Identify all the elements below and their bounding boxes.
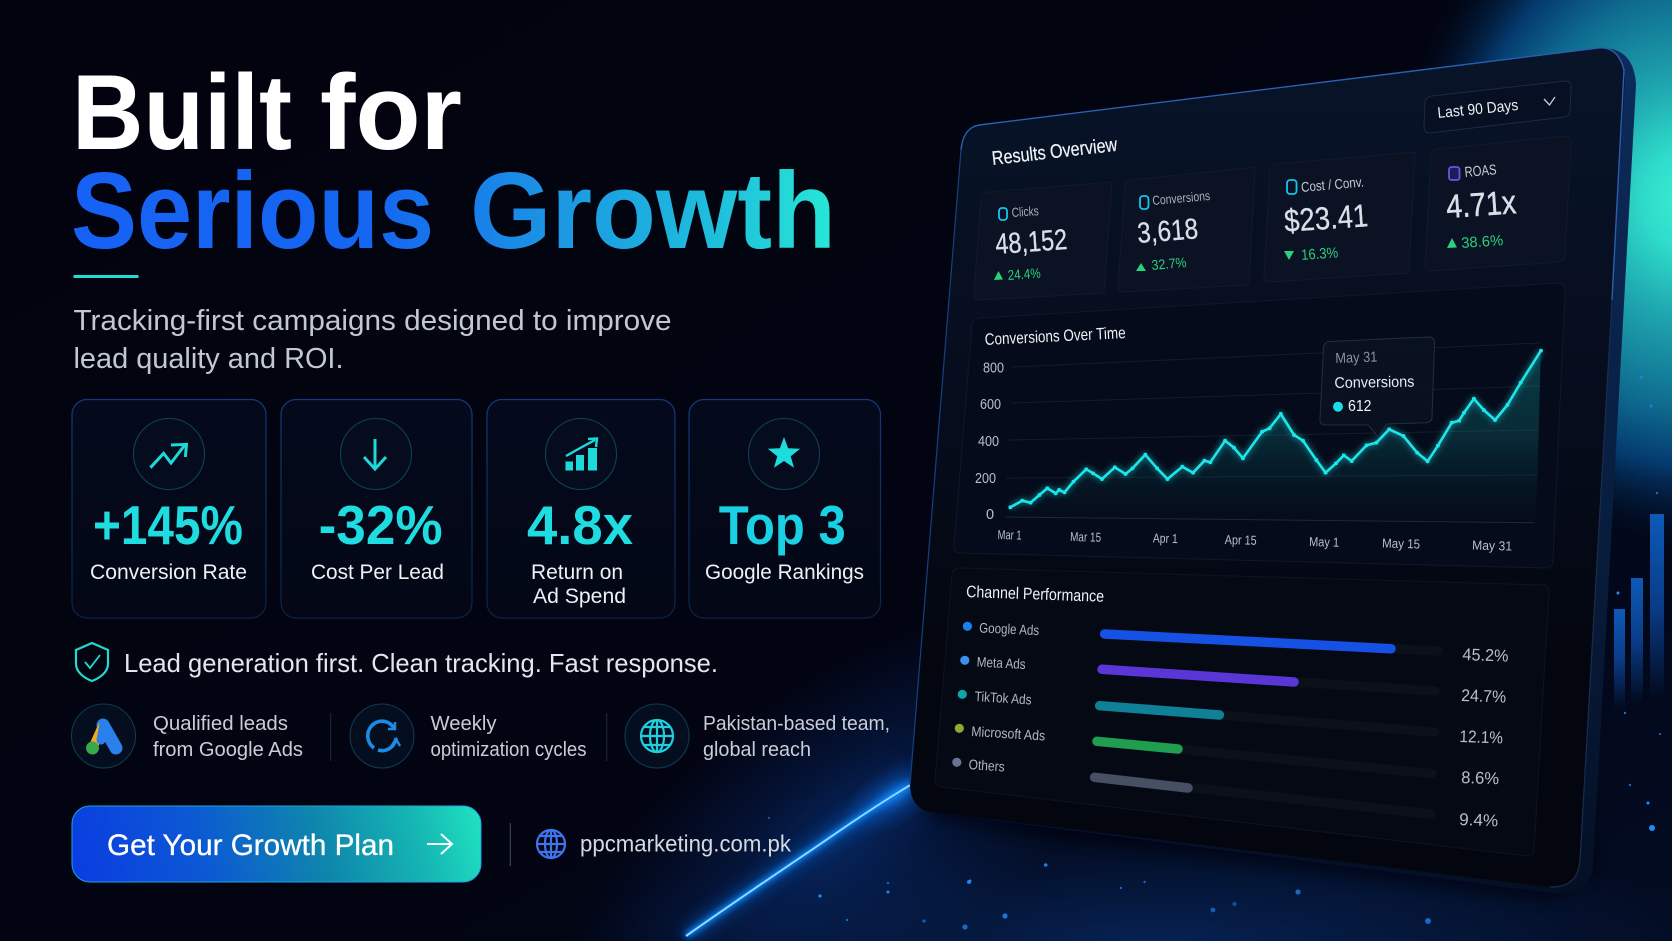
metric label: Cost Per Lead bbox=[311, 560, 444, 584]
title line one: Built bbox=[72, 52, 292, 172]
channel row: google ads: Google Ads bbox=[979, 620, 1040, 638]
icon: cost bbox=[1287, 180, 1296, 194]
accent underline bbox=[74, 275, 138, 278]
line chart: May 15 bbox=[1382, 536, 1420, 551]
tagline: Lead generation first. Clean tracking. Fast response. bbox=[124, 648, 718, 678]
icon: globe bbox=[625, 704, 689, 768]
stat card: cost per conversion: 16.3% bbox=[1301, 244, 1339, 264]
metric label bbox=[531, 560, 626, 608]
feature: global team bbox=[625, 704, 890, 768]
channel row: meta ads: Meta Ads bbox=[976, 654, 1026, 672]
stat card: clicks: 48,152 bbox=[994, 224, 1068, 261]
tooltip: May 31 bbox=[1335, 350, 1378, 367]
metric label: Return on bbox=[531, 560, 623, 584]
stat card: clicks: 24.4% bbox=[1007, 265, 1041, 283]
feature text: optimization cycles bbox=[430, 738, 586, 761]
stat card: roas: 38.6% bbox=[1461, 232, 1504, 252]
tooltip: Conversions bbox=[1334, 374, 1415, 392]
icon: globe bbox=[537, 830, 565, 858]
feature text bbox=[430, 712, 586, 761]
dashboard tablet bbox=[910, 48, 1636, 898]
icon: conversions bbox=[1140, 196, 1148, 209]
channel row: others: 9.4% bbox=[1459, 810, 1498, 830]
stat card: roas: ROAS bbox=[1464, 162, 1497, 181]
feature text: Qualified leads bbox=[153, 712, 288, 735]
feature: qualified leads bbox=[72, 704, 303, 768]
line chart: 600 bbox=[980, 397, 1001, 413]
icon: google ads bbox=[72, 704, 136, 768]
icon: arrow right bbox=[427, 834, 452, 854]
title line one bbox=[72, 52, 462, 172]
metric value: 4.8x bbox=[527, 494, 633, 556]
tooltip bbox=[1320, 337, 1434, 437]
feature text: global reach bbox=[703, 738, 811, 761]
stat card: clicks bbox=[974, 182, 1112, 300]
stat card: cost per conversion: $23.41 bbox=[1283, 197, 1369, 239]
icon: trend up bbox=[134, 418, 204, 490]
feature text: Weekly bbox=[430, 712, 497, 735]
title line one: for bbox=[320, 52, 462, 172]
panel: google rankings bbox=[689, 400, 880, 618]
line chart: Mar 1 bbox=[997, 527, 1022, 543]
feature text: from Google Ads bbox=[153, 738, 303, 761]
stat card: conversions bbox=[1118, 167, 1255, 292]
metric label: Conversion Rate bbox=[90, 560, 247, 584]
feature text bbox=[153, 712, 303, 761]
line chart: Apr 1 bbox=[1153, 531, 1178, 546]
icon: star bbox=[748, 418, 820, 490]
light streak bbox=[686, 737, 963, 936]
channel row: microsoft ads bbox=[955, 723, 1500, 788]
line chart: 800 bbox=[983, 361, 1004, 377]
icon: roas bbox=[1449, 167, 1460, 180]
stat card: clicks: Clicks bbox=[1011, 203, 1040, 220]
stat card: cost per conversion bbox=[1264, 152, 1415, 282]
stat card: roas: 4.71x bbox=[1445, 183, 1518, 225]
line chart bbox=[975, 343, 1541, 554]
metric value: +145% bbox=[93, 494, 243, 556]
metric value: -32% bbox=[319, 494, 443, 556]
date range dropdown bbox=[1424, 81, 1571, 133]
icon: clicks bbox=[999, 208, 1007, 220]
heading: results overview: Results Overview bbox=[991, 134, 1119, 170]
stat card: conversions: 3,618 bbox=[1136, 213, 1199, 250]
website text: ppcmarketing.com.pk bbox=[580, 830, 791, 856]
channel row: microsoft ads: 8.6% bbox=[1461, 768, 1500, 788]
particles bbox=[768, 376, 1661, 930]
stat card: roas bbox=[1425, 136, 1571, 271]
line chart: 200 bbox=[975, 471, 996, 487]
icon: shield check bbox=[76, 643, 108, 681]
channel row: tiktok ads: TikTok Ads bbox=[974, 688, 1032, 707]
feature text bbox=[703, 712, 890, 761]
panel: cost per lead bbox=[281, 400, 472, 618]
panel heading: Channel Performance bbox=[966, 583, 1104, 606]
metric label: Google Rankings bbox=[705, 560, 864, 584]
date range dropdown: Last 90 Days bbox=[1437, 97, 1519, 122]
channel row: others bbox=[952, 756, 1498, 830]
channel row: tiktok ads bbox=[958, 688, 1503, 748]
tooltip: 612 bbox=[1348, 398, 1372, 415]
channel row: google ads bbox=[963, 620, 1509, 666]
stat card: conversions: Conversions bbox=[1152, 188, 1211, 208]
panel: channel performance bbox=[935, 568, 1549, 856]
line chart: 400 bbox=[978, 434, 999, 450]
channel row: tiktok ads: 12.1% bbox=[1459, 727, 1503, 748]
line chart: Mar 15 bbox=[1070, 529, 1101, 545]
title bbox=[71, 52, 836, 272]
subtitle: lead quality and ROI. bbox=[74, 343, 344, 375]
title line two: Serious bbox=[71, 150, 434, 272]
decorative glowing bars at right bbox=[1614, 514, 1664, 709]
subtitle: Tracking-first campaigns designed to improve bbox=[74, 305, 672, 337]
line chart: Apr 15 bbox=[1225, 532, 1257, 548]
stat card: cost per conversion: Cost / Conv. bbox=[1300, 174, 1365, 195]
feature text: Pakistan-based team, bbox=[703, 712, 890, 735]
icon: arrow down bbox=[340, 418, 412, 490]
metric value: Top 3 bbox=[719, 494, 846, 556]
icon: refresh cycle bbox=[350, 704, 414, 768]
line chart: May 31 bbox=[1472, 538, 1512, 554]
channel row: meta ads bbox=[960, 654, 1506, 707]
panel: return on ad spend bbox=[487, 400, 675, 618]
line chart: May 1 bbox=[1309, 534, 1339, 550]
channel row: meta ads: 24.7% bbox=[1461, 686, 1506, 707]
channel row: others: Others bbox=[968, 756, 1005, 775]
button label: Get Your Growth Plan bbox=[107, 829, 394, 862]
panel: conversions over time bbox=[954, 283, 1565, 568]
button: get your growth plan bbox=[72, 806, 481, 882]
metric label: Ad Spend bbox=[533, 584, 626, 608]
subtitle bbox=[74, 305, 672, 375]
icon: bar growth bbox=[546, 418, 616, 490]
channel row: microsoft ads: Microsoft Ads bbox=[971, 723, 1046, 744]
title line two: Growth bbox=[470, 150, 836, 272]
title line two bbox=[71, 150, 836, 272]
website link bbox=[537, 830, 791, 858]
chart title: Conversions Over Time bbox=[984, 324, 1126, 349]
feature: weekly optimization bbox=[350, 704, 586, 768]
line chart: 0 bbox=[986, 507, 994, 523]
channel row: google ads: 45.2% bbox=[1462, 645, 1509, 666]
stat card: conversions: 32.7% bbox=[1151, 254, 1187, 273]
panel: conversion rate bbox=[72, 400, 266, 618]
